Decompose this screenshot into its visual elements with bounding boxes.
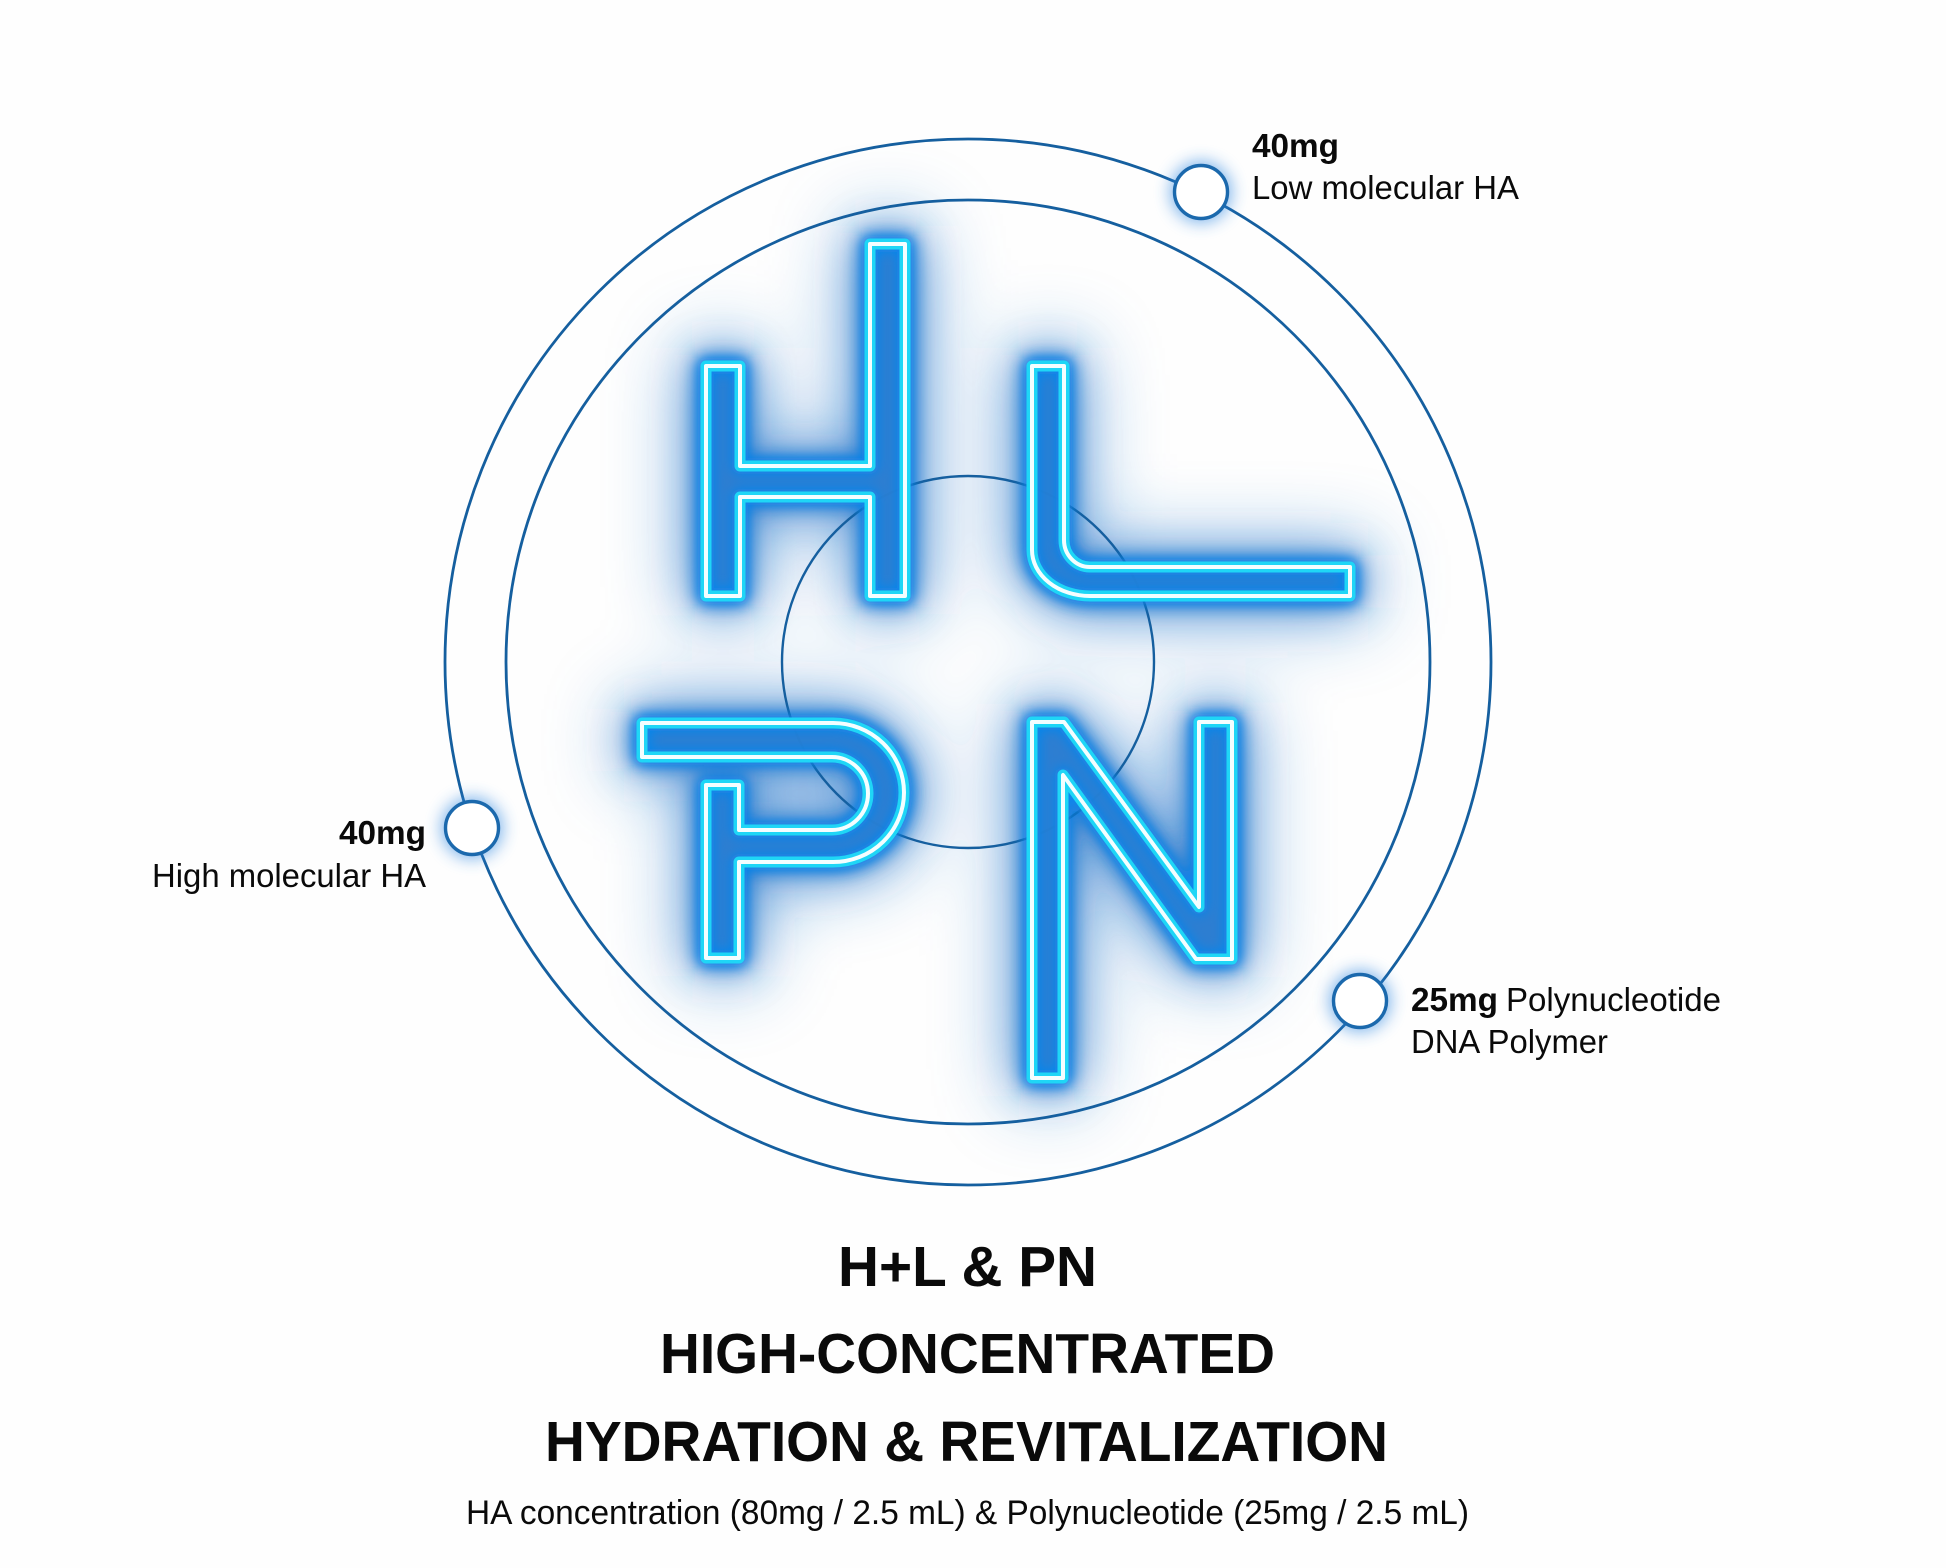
label: polynucleotide: Polynucleotide (1506, 981, 1721, 1018)
neon letter P (642, 723, 904, 958)
label: low molecular HA: 40mg (1252, 127, 1339, 164)
label: polynucleotide: 25mg (1411, 981, 1498, 1018)
inner ring (782, 476, 1154, 848)
label: low molecular HA (1252, 127, 1519, 206)
node: polynucleotide (1329, 970, 1391, 1032)
label: high molecular HA: High molecular HA (152, 857, 426, 894)
title: H+L & PN (838, 1235, 1097, 1299)
subtitle: HA concentration (80mg / 2.5 mL) & Polynucleotide (25mg / 2.5 mL) (466, 1494, 1469, 1532)
middle ring (506, 200, 1430, 1124)
label: polynucleotide: DNA Polymer (1411, 1023, 1608, 1060)
label: high molecular HA (152, 814, 426, 894)
title: HIGH-CONCENTRATED (660, 1322, 1275, 1386)
label: low molecular HA: Low molecular HA (1252, 169, 1519, 206)
title (545, 1235, 1388, 1474)
concentric orbit rings (445, 139, 1491, 1185)
neon glow halo behind letters (642, 244, 1350, 1078)
title: HYDRATION & REVITALIZATION (545, 1410, 1388, 1474)
node: low molecular HA (1170, 161, 1232, 223)
neon letter L (1032, 366, 1350, 596)
label: polynucleotide (1411, 981, 1721, 1060)
node: high molecular HA (441, 797, 503, 859)
neon letter H (706, 244, 905, 596)
neon letter N (1032, 722, 1232, 1078)
label: high molecular HA: 40mg (339, 814, 426, 851)
outer ring (445, 139, 1491, 1185)
